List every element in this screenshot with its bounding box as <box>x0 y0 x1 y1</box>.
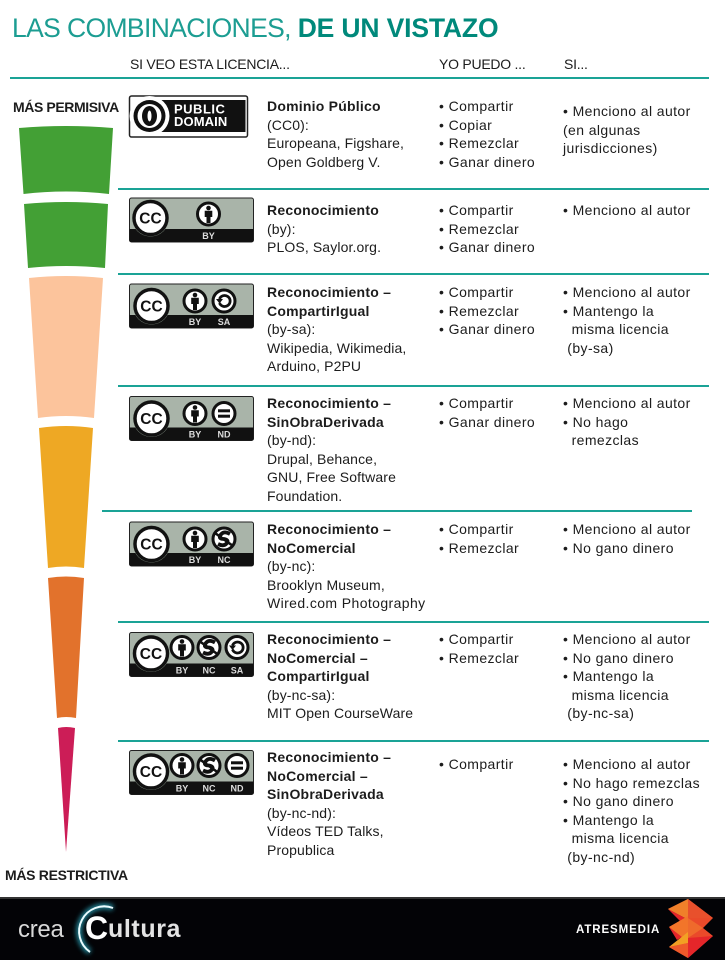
row 5: can: • Compartir <box>439 521 514 537</box>
logo: creaCultura: C <box>85 910 108 946</box>
row 1: licence text: (CC0): <box>267 116 309 132</box>
badge: by-nc-sa <box>130 632 254 676</box>
badge: public domain: PUBLIC <box>174 102 226 116</box>
row 7: licence text <box>267 749 391 858</box>
row 3: licence text: Wikipedia, Wikimedia, <box>267 340 406 356</box>
row 3: if: misma licencia <box>572 321 669 337</box>
row 4: licence text: Reconocimiento – <box>267 395 391 411</box>
row 1: if: jurisdicciones) <box>563 140 658 156</box>
row 4: licence text: GNU, Free Software <box>267 469 396 485</box>
row 4: licence text: Foundation. <box>267 488 342 504</box>
row 6: can <box>439 631 519 666</box>
row 1: can: • Ganar dinero <box>439 154 535 170</box>
row 1: if <box>562 103 691 156</box>
badge: by: BY <box>202 231 215 241</box>
row 7: licence text: (by-nc-nd): <box>267 804 336 820</box>
logo: creaCultura: ultura <box>108 914 182 942</box>
row 7: if: • No hago remezclas <box>563 774 700 790</box>
badge: public domain <box>130 96 248 137</box>
column heading: if: SI... <box>564 56 588 72</box>
row 2: can: • Ganar dinero <box>439 239 535 255</box>
row 6: licence text: NoComercial – <box>267 650 368 666</box>
row 3: licence text: (by-sa): <box>267 321 315 337</box>
row 4: licence text: SinObraDerivada <box>267 414 384 430</box>
row 7: if: • No gano dinero <box>563 793 674 809</box>
row 6: if: • Menciono al autor <box>563 631 691 647</box>
row 4: can: • Ganar dinero <box>439 414 535 430</box>
row 5: if: • No gano dinero <box>563 540 674 556</box>
row 5: licence text: (by-nc): <box>267 558 315 574</box>
row 5: licence text: Wired.com Photography <box>267 595 426 611</box>
row 2: licence text <box>267 202 381 255</box>
title: LAS COMBINACIONES, DE UN VISTAZO <box>12 13 498 43</box>
row 4: if: remezclas <box>572 432 639 448</box>
row 3: licence text: Arduino, P2PU <box>267 358 361 374</box>
row 2: can <box>439 202 535 255</box>
row 3: can: • Remezclar <box>439 302 519 318</box>
row 3: if: • Menciono al autor <box>563 284 691 300</box>
badge: by-nd: CC <box>140 411 163 428</box>
badge: by-sa: CC <box>140 298 163 316</box>
row 7: if <box>563 756 700 865</box>
badge: by-sa: BY <box>189 317 201 327</box>
row 6: licence text: Reconocimiento – <box>267 631 391 647</box>
row 6: if <box>563 631 691 721</box>
row 3: licence text: CompartirIgual <box>267 302 370 318</box>
row 6: can: • Remezclar <box>439 650 519 666</box>
row 2: licence text: Reconocimiento <box>267 202 379 218</box>
row 6: if: misma licencia <box>572 686 669 702</box>
row 4: can <box>439 395 535 430</box>
badge: by-sa: SA <box>218 317 231 327</box>
permissiveness funnel <box>19 126 113 852</box>
row 4: if: • Menciono al autor <box>563 395 691 411</box>
badge: by-sa <box>130 284 254 328</box>
logo: creaCultura: crea <box>18 916 64 942</box>
row 7: licence text: SinObraDerivada <box>267 786 384 802</box>
row 5: licence text: NoComercial <box>267 540 356 556</box>
badge: by-nc: CC <box>140 536 163 554</box>
badge: by: CC <box>139 210 162 228</box>
badge: by-nc: NC <box>218 555 231 565</box>
column heading: licence: SI VEO ESTA LICENCIA... <box>130 56 290 72</box>
row 1: licence text: Dominio Público <box>267 98 381 114</box>
row 3: if <box>563 284 691 356</box>
row 5: if: • Menciono al autor <box>563 521 691 537</box>
row 5: if <box>563 521 691 556</box>
row 1: licence text: Europeana, Figshare, <box>267 135 404 151</box>
label: most permissive: MÁS PERMISIVA <box>13 99 119 115</box>
badge: by-nc-sa: SA <box>231 666 244 676</box>
row 7: if: (by-nc-nd) <box>567 848 635 864</box>
badge: by-nd: BY <box>189 430 201 440</box>
row 5: can: • Remezclar <box>439 540 519 556</box>
row 7: licence text: Reconocimiento – <box>267 749 391 765</box>
logo: Atresmedia <box>576 899 713 958</box>
badge: by-nc-nd: ND <box>230 784 244 794</box>
row 4: licence text: Drupal, Behance, <box>267 450 377 466</box>
badge: by-nc <box>130 522 254 566</box>
row 3: can: • Ganar dinero <box>439 321 535 337</box>
label: most restrictive: MÁS RESTRICTIVA <box>5 867 128 883</box>
badge: public domain: DOMAIN <box>174 114 227 129</box>
row 5: can <box>439 521 519 556</box>
row 4: licence text <box>267 395 396 504</box>
row 7: can: • Compartir <box>439 756 514 772</box>
row 7: licence text: Vídeos TED Talks, <box>267 823 384 839</box>
row 4: licence text: (by-nd): <box>267 432 316 448</box>
column heading: can: YO PUEDO ... <box>439 56 525 72</box>
row 3: licence text <box>267 284 406 374</box>
badge: by-nc-nd: NC <box>202 784 216 794</box>
row 7: if: • Mantengo la <box>563 812 654 828</box>
badge: by-nc-sa: NC <box>202 666 216 676</box>
row 3: can <box>439 284 535 337</box>
row 2: if: • Menciono al autor <box>563 202 691 218</box>
row 3: if: • Mantengo la <box>563 302 654 318</box>
row 7: if: misma licencia <box>572 830 669 846</box>
row 6: can: • Compartir <box>439 631 514 647</box>
row 4: if: • No hago <box>563 414 628 430</box>
badge: by-nc-sa: BY <box>176 666 188 676</box>
row 3: if: (by-sa) <box>567 340 614 356</box>
row 5: licence text: Reconocimiento – <box>267 521 391 537</box>
row 6: if: (by-nc-sa) <box>567 705 634 721</box>
row 1: can: • Compartir <box>439 98 514 114</box>
row 4: can: • Compartir <box>439 395 514 411</box>
row 2: can: • Compartir <box>439 202 514 218</box>
logo: creaCultura <box>18 900 182 956</box>
badge: by-nc: BY <box>189 555 201 565</box>
row 1: if: (en algunas <box>563 122 641 138</box>
row 6: licence text: MIT Open CourseWare <box>267 705 413 721</box>
badge: by <box>130 198 254 242</box>
row 2: can: • Remezclar <box>439 220 519 236</box>
badge: by-nc-nd: CC <box>140 764 162 781</box>
badge: by-nc-sa: CC <box>140 646 162 663</box>
row 1: licence text: Open Goldberg V. <box>267 154 380 170</box>
row 7: licence text: NoComercial – <box>267 768 368 784</box>
row 7: licence text: Propublica <box>267 842 334 858</box>
row 2: licence text: PLOS, Saylor.org. <box>267 239 381 255</box>
logo: Atresmedia: ATRESMEDIA <box>576 924 660 936</box>
row 6: if: • Mantengo la <box>563 668 654 684</box>
row 7: if: • Menciono al autor <box>563 756 691 772</box>
footer <box>0 897 725 960</box>
row 6: if: • No gano dinero <box>563 650 674 666</box>
badge: by-nc-nd: BY <box>176 784 188 794</box>
row 3: licence text: Reconocimiento – <box>267 284 391 300</box>
row 5: licence text: Brooklyn Museum, <box>267 576 385 592</box>
row 1: if: • Menciono al autor <box>563 103 691 119</box>
row 1: can: • Remezclar <box>439 135 519 151</box>
row 6: licence text: CompartirIgual <box>267 668 370 684</box>
row 4: if <box>563 395 691 448</box>
row 3: can: • Compartir <box>439 284 514 300</box>
row 6: licence text: (by-nc-sa): <box>267 686 335 702</box>
row 1: licence text <box>267 98 404 170</box>
badge: by-nd: ND <box>218 430 231 440</box>
badge: by-nc-nd <box>130 750 254 794</box>
row 6: licence text <box>267 631 413 721</box>
badge: by-nd <box>130 396 254 440</box>
row 1: can <box>439 98 535 170</box>
row 5: licence text <box>267 521 426 611</box>
row 1: can: • Copiar <box>439 116 492 132</box>
row 2: licence text: (by): <box>267 220 296 236</box>
